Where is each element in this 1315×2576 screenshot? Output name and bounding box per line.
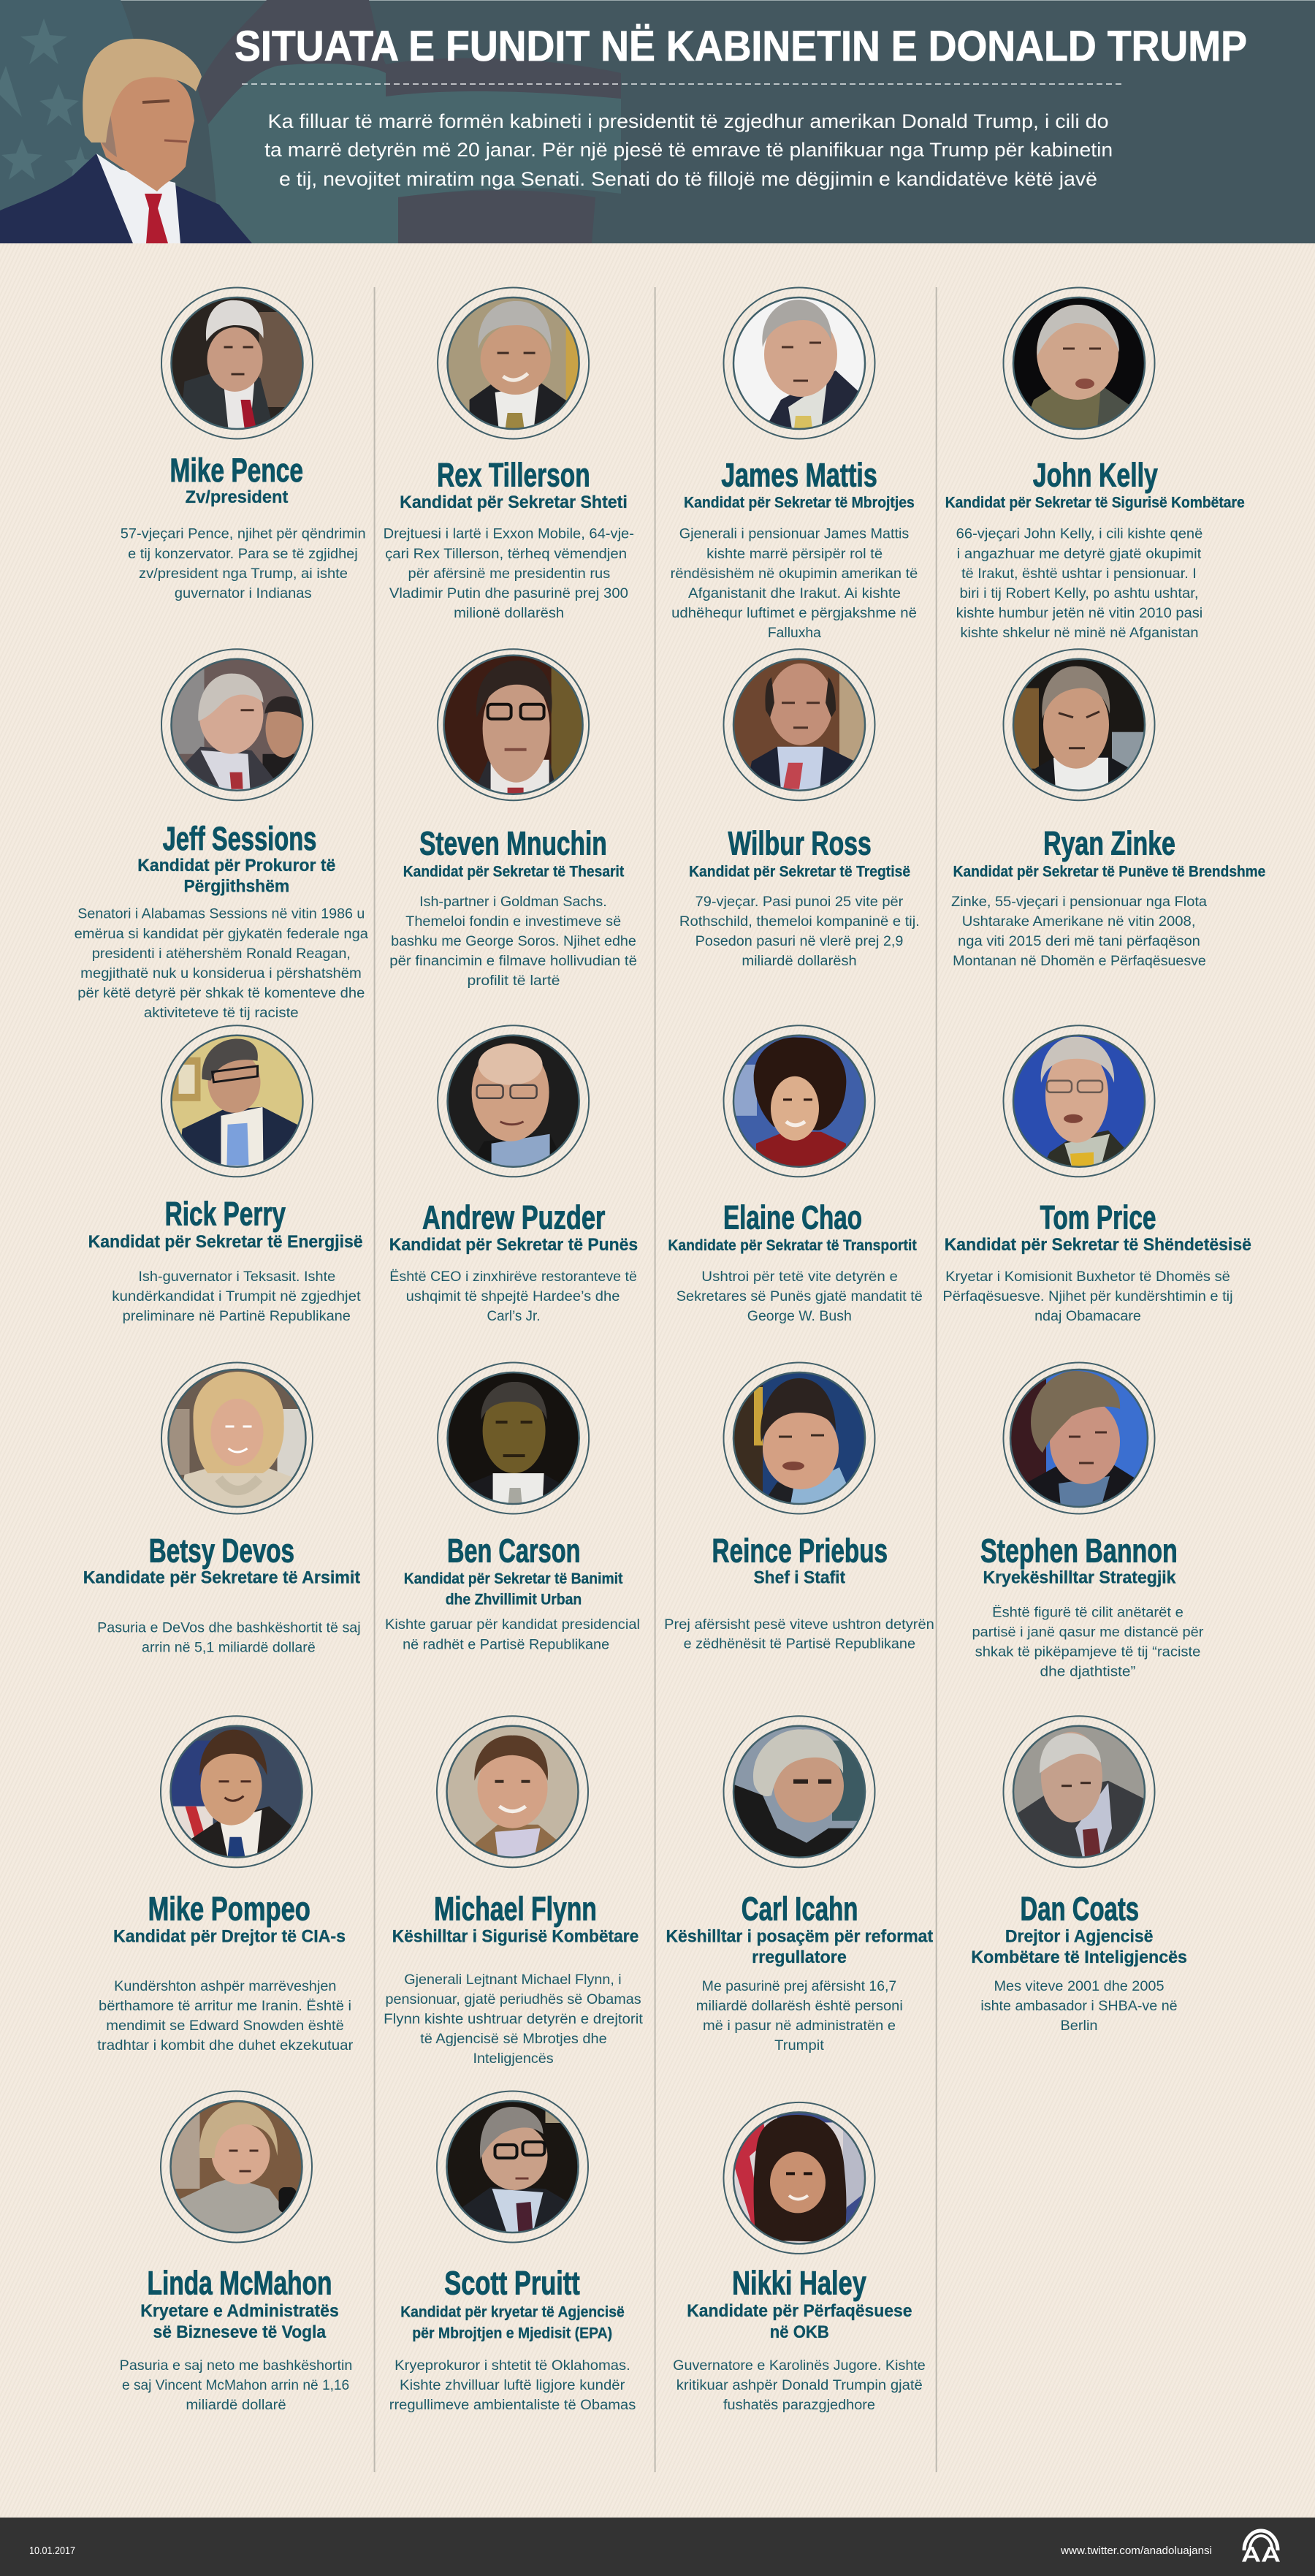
bio: Është figurë të cilit anëtarët e <box>992 1605 1184 1620</box>
card: Steven Mnuchin <box>389 649 637 989</box>
role: Kandidat për kryetar të Agjencisë <box>400 2304 625 2321</box>
role: Kandidat për Sekretar të Thesarit <box>403 863 624 880</box>
bio: partisë i janë qasur me distancë për <box>972 1625 1204 1640</box>
role <box>687 2301 912 2342</box>
role: së Bizneseve të Vogla <box>153 2322 327 2342</box>
portrait: Betsy Devos <box>161 1362 313 1514</box>
bio: ndaj Obamacare <box>1034 1309 1141 1324</box>
card: Dan Coats <box>971 1716 1187 2034</box>
portrait: John Kelly <box>1004 288 1154 438</box>
bio: Zinke, 55-vjeçari i pensionuar nga Flota <box>951 894 1207 910</box>
card: Jeff Sessions <box>75 649 368 1021</box>
bio: Afganistanit dhe Irakut. Ai kishte <box>688 586 901 601</box>
card: Linda McMahon <box>120 2091 352 2413</box>
bio: Është CEO i zinxhirëve restoranteve të <box>389 1269 637 1285</box>
bio: pensionuar, gjatë periudhës së Obamas <box>385 1992 641 2007</box>
bio: në radhët e Partisë Republikane <box>403 1637 609 1653</box>
role <box>140 2301 339 2342</box>
bio: fushatës parazgjedhore <box>723 2398 875 2413</box>
bio: Posedon pasuri në vlerë prej 2,9 <box>695 934 903 949</box>
name: Carl Icahn <box>742 1891 858 1928</box>
card: Carl Icahn <box>666 1716 933 2053</box>
role: Këshilltar i Sigurisë Kombëtare <box>392 1927 639 1947</box>
bio <box>389 894 637 989</box>
portrait: Rex Tillerson <box>438 288 589 438</box>
bio: Inteligjencës <box>473 2051 554 2067</box>
bio: Montanan në Dhomën e Përfaqësuesve <box>953 954 1206 969</box>
portrait: Rick Perry <box>161 1025 313 1177</box>
bio <box>389 1269 637 1324</box>
role: Kandidat për Drejtor të CIA-s <box>113 1927 346 1947</box>
portrait: Donald Trump <box>0 39 252 243</box>
name: Mike Pompeo <box>148 1891 310 1928</box>
name: John Kelly <box>1033 457 1158 494</box>
bio: Përfaqësuesve. Njihet për kundërshtimin e tij <box>942 1289 1233 1304</box>
bio <box>121 527 366 601</box>
bio <box>696 1979 903 2053</box>
bio: e saj Vincent McMahon arrin në 1,16 <box>122 2378 349 2393</box>
bio <box>384 1972 644 2067</box>
card: Rick Perry <box>88 1025 363 1324</box>
bio: Gjenerali i pensionuar James Mattis <box>679 527 909 542</box>
bio <box>75 907 368 1021</box>
name: Rick Perry <box>165 1196 286 1233</box>
intro text: Ka filluar të marrë formën kabineti i presidentit të zgjedhur amerikan Donald Trump, i cili do <box>267 110 1109 132</box>
bio: Berlin <box>1061 2018 1097 2034</box>
bio <box>972 1605 1204 1679</box>
card: Reince Priebus <box>664 1362 934 1652</box>
name: Reince Priebus <box>712 1532 888 1570</box>
role: rregullatore <box>752 1948 847 1967</box>
bio: Guvernatore e Karolinës Jugore. Kishte <box>673 2358 926 2374</box>
bio <box>112 1269 361 1324</box>
portrait: Reince Priebus <box>723 1362 875 1514</box>
role: Kombëtare të Inteligjencës <box>971 1948 1187 1967</box>
bio: Ushtroi për tetë vite detyrën e <box>701 1269 898 1285</box>
bio: miliardë dollarë <box>186 2398 286 2413</box>
name: Dan Coats <box>1021 1891 1139 1928</box>
bio <box>671 527 918 641</box>
portrait: Scott Pruitt <box>437 2091 588 2242</box>
name: Wilbur Ross <box>728 824 872 862</box>
role <box>404 1570 622 1608</box>
name: James Mattis <box>721 457 877 494</box>
bio: të Agjencisë së Mbrotjes dhe <box>420 2032 607 2047</box>
bio: për financimin e filmave hollivudian të <box>389 954 637 969</box>
bio: Flynn kishte ushtruar detyrën e drejtorit <box>384 2012 644 2027</box>
bio: Me pasurinë prej afërsisht 16,7 <box>702 1979 896 1994</box>
bio: miliardë dollarësh është personi <box>696 1999 903 2014</box>
bio: Kryeprokuror i shtetit të Oklahomas. <box>394 2358 630 2374</box>
bio: e tij konzervator. Para se të zgjidhej <box>128 547 358 562</box>
bio: bërthamore të arritur me Iranin. Është i <box>99 1999 351 2014</box>
bio: rëndësishëm në okupimin amerikan të <box>671 566 918 582</box>
card: Elaine Chao <box>668 1025 923 1324</box>
role <box>400 2304 625 2341</box>
bio: Mes viteve 2001 dhe 2005 <box>994 1979 1165 1994</box>
bio: presidenti i atëhershëm Ronald Reagan, <box>92 946 351 962</box>
role: në OKB <box>770 2322 829 2342</box>
bio: Pasuria e saj neto me bashkëshortin <box>120 2358 352 2374</box>
role: Kandidat për Sekretar të Punës <box>389 1235 638 1255</box>
intro text: e tij, nevojitet miratim nga Senati. Senati do të fillojë me dëgjimin e kandidatëve këtë javë <box>279 168 1097 190</box>
bio: milionë dollarësh <box>454 606 564 621</box>
card: Mike Pence <box>121 288 366 601</box>
role <box>971 1927 1187 1967</box>
bio: ishte ambasador i SHBA-ve në <box>980 1999 1178 2014</box>
role: dhe Zhvillimit Urban <box>446 1592 582 1608</box>
bio: arrin në 5,1 miliardë dollarë <box>142 1640 316 1656</box>
card: John Kelly <box>945 288 1245 641</box>
portrait: Andrew Puzder <box>438 1025 589 1177</box>
role: Kandidat për Sekretar të Tregtisë <box>689 863 910 880</box>
bio: Carl’s Jr. <box>487 1309 540 1324</box>
role: Kryetare e Administratës <box>140 2301 339 2321</box>
portrait: Jeff Sessions <box>161 649 313 800</box>
bio <box>389 2358 636 2413</box>
bio: dhe djathtiste” <box>1040 1664 1135 1679</box>
portrait: Wilbur Ross <box>723 649 875 800</box>
role: Zv/president <box>186 487 288 507</box>
role: Kandidate për Përfaqësuese <box>687 2301 912 2321</box>
twitter url: www.twitter.com/anadoluajansi <box>1060 2545 1212 2557</box>
role: Këshilltar i posaçëm për reformat <box>666 1927 933 1947</box>
name: Ryan Zinke <box>1043 824 1175 862</box>
card: Mike Pompeo <box>97 1716 354 2053</box>
card: Nikki Haley <box>673 2102 926 2413</box>
bio: shkak të pikëpamjeve të tij “raciste <box>975 1644 1200 1660</box>
name: Rex Tillerson <box>437 457 590 494</box>
role: Kryekëshilltar Strategjik <box>983 1568 1176 1587</box>
bio <box>956 527 1202 641</box>
icon: Anadolu Agency logo: AA <box>1241 2543 1281 2567</box>
bio: të Irakut, është ushtar i pensionuar. I <box>961 566 1197 582</box>
bio: Kishte garuar për kandidat presidencial <box>385 1617 640 1633</box>
bio: kishte shkelur në minë në Afganistan <box>960 626 1198 641</box>
bio: për këtë detyrë për shkak të komenteve dhe <box>77 986 365 1001</box>
card: Rex Tillerson <box>384 288 634 621</box>
portrait: Ben Carson <box>438 1362 589 1514</box>
card: Ryan Zinke <box>951 649 1265 969</box>
bio: profilit të lartë <box>468 973 560 989</box>
role <box>137 856 335 897</box>
role: Kandidat për Sekretar të Punëve të Brendshme <box>953 863 1265 880</box>
name: Andrew Puzder <box>422 1198 605 1236</box>
bio <box>951 894 1207 969</box>
bio <box>385 1617 640 1653</box>
portrait: Mike Pence <box>161 288 313 438</box>
bio: emërua si kandidat për gjykatën federale nga <box>75 927 368 942</box>
footer bar <box>0 2518 1315 2576</box>
card: Wilbur Ross <box>679 649 920 969</box>
bio: bashku me George Soros. Njihet edhe <box>391 934 636 949</box>
bio: kundërkandidat i Trumpit në zgjedhjet <box>112 1289 361 1304</box>
bio: i angazhuar me detyrë gjatë okupimit <box>957 547 1202 562</box>
card: Ben Carson <box>385 1362 640 1653</box>
bio: rregullimeve ambientaliste të Obamas <box>389 2398 636 2413</box>
bio: kishte humbur jetën në vitin 2010 pasi <box>956 606 1202 621</box>
bio <box>97 1621 361 1656</box>
portrait: Michael Flynn <box>437 1716 588 1867</box>
role: Kandidat për Sekretar Shteti <box>400 493 628 512</box>
card: James Mattis <box>671 288 918 641</box>
bio <box>673 2358 926 2413</box>
portrait: Elaine Chao <box>723 1025 875 1177</box>
bio: zv/president nga Trump, ai ishte <box>139 566 348 582</box>
bio: Pasuria e DeVos dhe bashkëshortit të saj <box>97 1621 361 1635</box>
role <box>666 1927 933 1967</box>
bio: çari Rex Tillerson, tërheq vëmendjen <box>385 547 627 562</box>
portrait: Linda McMahon <box>161 2091 312 2242</box>
bio: Prej afërsisht pesë viteve ushtron detyrën <box>664 1617 934 1633</box>
name: Elaine Chao <box>723 1198 862 1236</box>
name: Michael Flynn <box>434 1891 597 1928</box>
name: Linda McMahon <box>148 2265 332 2302</box>
portrait: Nikki Haley <box>723 2102 875 2254</box>
role: Kandidat për Sekretar të Energjisë <box>88 1232 363 1252</box>
bio: megjithatë nuk u konsiderua i përshatshëm <box>80 966 362 981</box>
portrait: Ryan Zinke <box>1004 649 1154 800</box>
role: Drejtor i Agjencisë <box>1005 1927 1153 1947</box>
card: Michael Flynn <box>384 1716 644 2067</box>
bio: George W. Bush <box>747 1309 852 1324</box>
title: SITUATA E FUNDIT NË KABINETIN E DONALD TRUMP <box>235 23 1247 70</box>
card: Betsy Devos <box>83 1362 361 1656</box>
name: Tom Price <box>1040 1198 1156 1236</box>
bio: Ushtarake Amerikane në vitin 2008, <box>962 914 1195 930</box>
bio: 79-vjeçar. Pasi punoi 25 vite për <box>695 894 904 910</box>
bio: Vladimir Putin dhe pasurinë prej 300 <box>389 586 628 601</box>
bio <box>942 1269 1233 1324</box>
bio: Kundërshton ashpër marrëveshjen <box>114 1979 336 1994</box>
bio: Drejtuesi i lartë i Exxon Mobile, 64-vje- <box>384 527 634 542</box>
role: Kandidate për Sekretare të Arsimit <box>83 1568 360 1587</box>
name: Ben Carson <box>447 1532 580 1570</box>
role: Përgjithshëm <box>183 877 289 897</box>
bio: aktiviteteve të tij raciste <box>144 1006 299 1021</box>
bio: tradhtar i kombit dhe duhet ekzekutuar <box>97 2038 354 2053</box>
bio: Gjenerali Lejtnant Michael Flynn, i <box>404 1972 622 1988</box>
role: Shef i Stafit <box>753 1568 845 1587</box>
bio: kishte marrë përsipër rol të <box>706 547 883 562</box>
bio: Ish-guvernator i Teksasit. Ishte <box>138 1269 335 1285</box>
bio: Rothschild, themeloi kompaninë e tij. <box>679 914 920 930</box>
bio: Kishte zhvilluar luftë ligjore kundër <box>400 2378 625 2393</box>
bio <box>664 1617 934 1652</box>
role: Kandidat për Prokuror të <box>137 856 335 875</box>
header banner <box>0 0 1315 243</box>
portrait: Tom Price <box>1004 1025 1154 1177</box>
bio <box>97 1979 354 2053</box>
bio <box>679 894 920 969</box>
bio: guvernator i Indianas <box>175 586 312 601</box>
bio: ushqimit të shpejtë Hardee’s dhe <box>406 1289 620 1304</box>
portrait: Dan Coats <box>1004 1716 1154 1867</box>
intro text: ta marrë detyrën më 20 janar. Për një pjesë të emrave të planifikuar nga Trump për kabinetin <box>264 139 1113 161</box>
bio: Senatori i Alabamas Sessions në vitin 1986 u <box>77 907 365 922</box>
portrait: Steven Mnuchin <box>438 649 589 800</box>
bio: Themeloi fondin e investimeve së <box>405 914 621 930</box>
bio <box>384 527 634 621</box>
bio <box>676 1269 923 1324</box>
bio: e zëdhënësit të Partisë Republikane <box>684 1637 915 1652</box>
name: Mike Pence <box>170 452 303 489</box>
bio <box>120 2358 352 2413</box>
bio: mendimit se Edward Snowden është <box>106 2018 344 2034</box>
name: Steven Mnuchin <box>419 824 607 862</box>
bio: 66-vjeçari John Kelly, i cili kishte qenë <box>956 527 1202 542</box>
role: Kandidat për Sekretar të Shëndetësisë <box>945 1235 1251 1255</box>
portrait: James Mattis <box>723 288 875 438</box>
bio: nga viti 2015 deri më tani përfaqëson <box>958 934 1200 949</box>
card: Andrew Puzder <box>389 1025 638 1324</box>
role: për Mbrojtjen e Mjedisit (EPA) <box>412 2325 612 2341</box>
bio: preliminare në Partinë Republikane <box>123 1309 351 1324</box>
card: Tom Price <box>942 1025 1251 1324</box>
bio: 57-vjeçari Pence, njihet për qëndrimin <box>121 527 366 542</box>
name: Jeff Sessions <box>163 820 316 857</box>
card: Stephen Bannon <box>972 1362 1204 1679</box>
bio: Ish-partner i Goldman Sachs. <box>419 894 607 910</box>
name: Scott Pruitt <box>444 2265 580 2302</box>
bio: miliardë dollarësh <box>742 954 857 969</box>
bio: më i pasur në administratën e <box>703 2018 896 2034</box>
role: Kandidat për Sekretar të Banimit <box>404 1570 622 1587</box>
bio: kritikuar ashpër Donald Trumpin gjatë <box>676 2378 923 2393</box>
name: Betsy Devos <box>149 1532 294 1570</box>
bio: Sekretares së Punës gjatë mandatit të <box>676 1289 923 1304</box>
name: Nikki Haley <box>732 2265 866 2302</box>
role: Kandidate për Sekratar të Transportit <box>668 1237 917 1254</box>
role: Kandidat për Sekretar të Mbrojtjes <box>684 494 915 511</box>
bio: Falluxha <box>768 626 821 641</box>
bio <box>980 1979 1178 2034</box>
portrait: Stephen Bannon <box>1004 1362 1154 1514</box>
intro text <box>264 110 1113 190</box>
portrait: Mike Pompeo <box>161 1716 312 1867</box>
role: Kandidat për Sekretar të Sigurisë Kombëtare <box>945 494 1245 511</box>
bio: Kryetar i Komisionit Buxhetor të Dhomës së <box>945 1269 1230 1285</box>
card: Scott Pruitt <box>389 2091 636 2413</box>
bio: Trumpit <box>774 2038 825 2053</box>
bio: udhëhequr luftimet e përgjakshme në <box>671 606 917 621</box>
name: Stephen Bannon <box>980 1532 1178 1570</box>
portrait: Carl Icahn <box>723 1716 875 1867</box>
bio: për afërsinë me presidentin rus <box>408 566 610 582</box>
icon: Anadolu Agency logo <box>1241 2531 1281 2567</box>
date: 10.01.2017 <box>29 2545 75 2557</box>
bio: biri i tij Robert Kelly, po ashtu ushtar, <box>960 586 1198 601</box>
